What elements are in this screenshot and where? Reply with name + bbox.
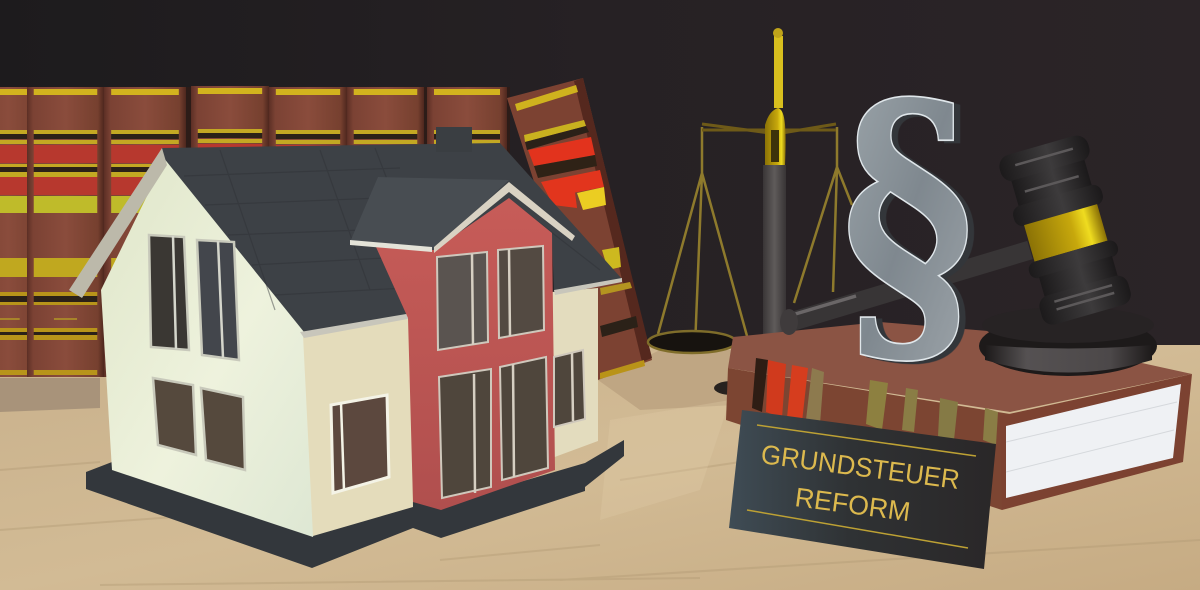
red front [376, 198, 555, 510]
front gable roof [350, 177, 509, 250]
right cream walls [303, 318, 413, 536]
paragraph sign: § [841, 34, 975, 406]
gavel handle [780, 250, 1030, 335]
left pan [648, 331, 736, 353]
red front windows [437, 246, 585, 498]
cream wall window [331, 395, 389, 493]
book row: law books on the left [0, 78, 652, 380]
lower left windows [153, 378, 245, 470]
left wall [101, 155, 320, 537]
background: dark wall [0, 0, 1200, 350]
house base [86, 440, 624, 568]
sign text: GRUNDSTEUER [759, 439, 961, 495]
left barge board [69, 148, 167, 298]
main roof [162, 143, 622, 332]
background: wooden table [0, 345, 1200, 590]
scales column [763, 165, 786, 340]
sign text: REFORM [793, 482, 912, 527]
chimney [436, 127, 472, 152]
leaning book [507, 78, 652, 380]
book under gavel [726, 322, 1192, 510]
gavel head [997, 133, 1133, 327]
sign: Grundsteuer Reform [729, 410, 996, 569]
gavel sound block [979, 307, 1157, 376]
sign text [759, 439, 961, 527]
scales of justice [648, 28, 852, 395]
roof tile lines [184, 148, 600, 310]
eave strip [300, 311, 424, 338]
model house [69, 127, 624, 568]
upper left windows [149, 235, 239, 360]
gavel [780, 133, 1157, 376]
